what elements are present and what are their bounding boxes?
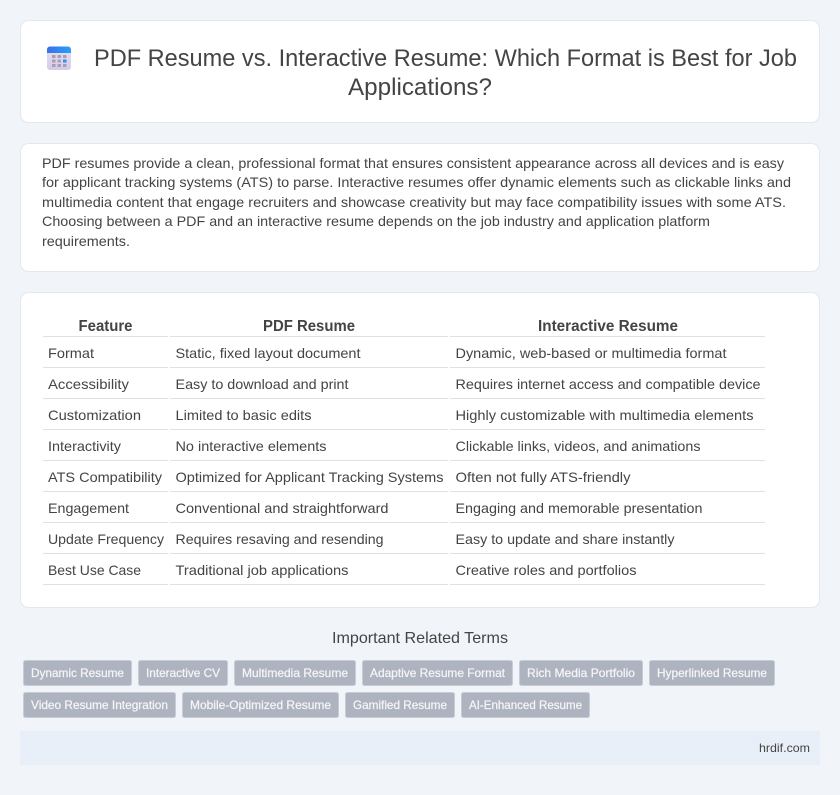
table rows: Requires internet access and compatible device	[456, 376, 761, 392]
footer: hrdif.com	[759, 741, 810, 755]
table rows: Customization	[48, 407, 141, 423]
table header: Interactive Resume	[538, 318, 678, 335]
table rows: Traditional job applications	[176, 562, 348, 578]
table rows: Interactivity	[48, 438, 121, 454]
tags: related terms: AI-Enhanced Resume	[469, 698, 582, 712]
table rows: Optimized for Applicant Tracking Systems	[176, 469, 444, 485]
text block: introduction: for applicant tracking systems (ATS) to parse. Interactive resumes offer dynamic elements such as clickable links and	[42, 174, 791, 190]
table rows: Engagement	[48, 500, 129, 516]
table rows: No interactive elements	[176, 438, 326, 454]
table header: Feature	[78, 318, 133, 335]
table rows: Creative roles and portfolios	[456, 562, 636, 578]
table rows: Easy to update and share instantly	[456, 531, 674, 547]
table rows	[48, 345, 761, 578]
tags: related terms: Hyperlinked Resume	[657, 666, 767, 680]
table rows: Easy to download and print	[176, 376, 349, 392]
table rows: Conventional and straightforward	[176, 500, 388, 516]
text block: introduction: PDF resumes provide a clean, professional format that ensures consistent appearance across all devices and is easy	[42, 155, 784, 171]
text block: introduction: Choosing between a PDF and an interactive resume depends on the job industry and application platform	[42, 213, 710, 229]
table rows: Often not fully ATS-friendly	[456, 469, 630, 485]
table rows: Dynamic, web-based or multimedia format	[456, 345, 727, 361]
table rows: Accessibility	[48, 376, 129, 392]
table rows: Static, fixed layout document	[176, 345, 361, 361]
tags: related terms	[24, 660, 774, 718]
title	[94, 45, 797, 101]
tags: related terms: Dynamic Resume	[31, 666, 124, 680]
tags: related terms: Interactive CV	[146, 666, 220, 680]
panel: comparison table	[20, 292, 820, 608]
table header	[78, 318, 678, 335]
panel: header	[20, 20, 820, 122]
heading: related terms: Important Related Terms	[332, 630, 508, 647]
tags: related terms: Multimedia Resume	[242, 666, 348, 680]
table rows: Format	[48, 345, 94, 361]
icon: calendar	[47, 46, 71, 70]
title: Applications?	[348, 74, 492, 101]
table rows: Requires resaving and resending	[176, 531, 384, 547]
tags: related terms: Mobile-Optimized Resume	[190, 698, 331, 712]
table rows: Engaging and memorable presentation	[456, 500, 702, 516]
tags: related terms: Video Resume Integration	[31, 698, 168, 712]
table rows: Best Use Case	[48, 562, 141, 578]
table rows: Highly customizable with multimedia elements	[456, 407, 754, 423]
table rows: ATS Compatibility	[48, 469, 162, 485]
panel: introduction	[20, 144, 820, 272]
tags: related terms: Gamified Resume	[353, 698, 447, 712]
tags: related terms: Adaptive Resume Format	[370, 666, 506, 680]
tags: related terms: Rich Media Portfolio	[527, 666, 635, 680]
table rows: Update Frequency	[48, 531, 164, 547]
table rows: Limited to basic edits	[176, 407, 312, 423]
table header: PDF Resume	[263, 318, 355, 335]
text block: introduction: requirements.	[42, 233, 130, 249]
text block: introduction	[42, 155, 791, 249]
table rows: Clickable links, videos, and animations	[456, 438, 700, 454]
footer	[20, 731, 820, 765]
text block: introduction: multimedia content that engage recruiters and showcase creativity but may face compatibility issues with some ATS.	[42, 194, 786, 210]
title: PDF Resume vs. Interactive Resume: Which Format is Best for Job	[94, 45, 797, 72]
table grid lines	[43, 336, 765, 585]
